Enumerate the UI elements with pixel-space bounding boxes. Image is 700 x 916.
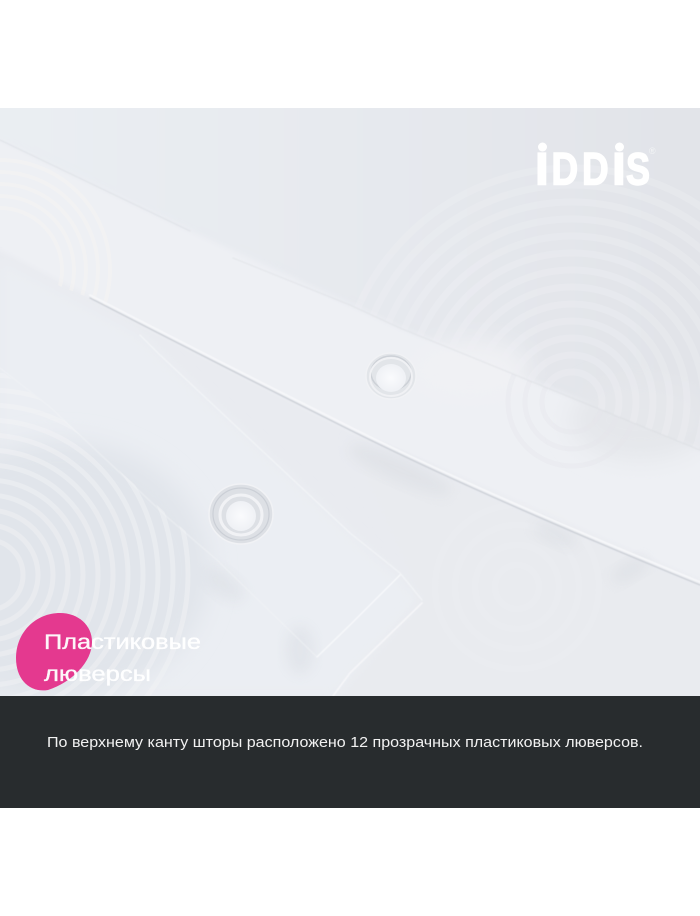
logo: IDDIS: D <box>582 144 609 194</box>
logo: IDDIS: I <box>612 145 626 195</box>
pattern: concentric circles lower right <box>435 505 599 669</box>
icon: upper transparent eyelet <box>366 353 416 399</box>
icon: lower transparent eyelet <box>209 484 273 544</box>
logo: IDDIS <box>535 142 656 195</box>
text: caption: По верхнему канту шторы расположено 12 прозрачных пластиковых люверсов. <box>47 735 643 751</box>
pattern: concentric circles upper left <box>0 160 110 380</box>
logo: IDDIS: I <box>535 145 549 195</box>
heading: plastic eyelets <box>44 630 201 686</box>
pattern: concentric circles lower left <box>0 375 188 775</box>
heading: plastic eyelets: Пластиковые <box>44 630 201 654</box>
pattern: concentric circles right <box>338 168 700 636</box>
panel: dark caption band <box>0 696 700 808</box>
icon: pink blob behind heading <box>16 613 92 690</box>
fabric shadows <box>220 578 306 662</box>
curtain hem seam lines <box>90 295 700 696</box>
heading: plastic eyelets: люверсы <box>44 662 151 686</box>
pattern: concentric circles on hem <box>508 338 636 466</box>
logo: IDDIS: ® <box>649 146 656 156</box>
panel: curtain photo <box>0 108 700 696</box>
logo: IDDIS: S <box>626 144 650 194</box>
logo: IDDIS: D <box>552 144 578 194</box>
